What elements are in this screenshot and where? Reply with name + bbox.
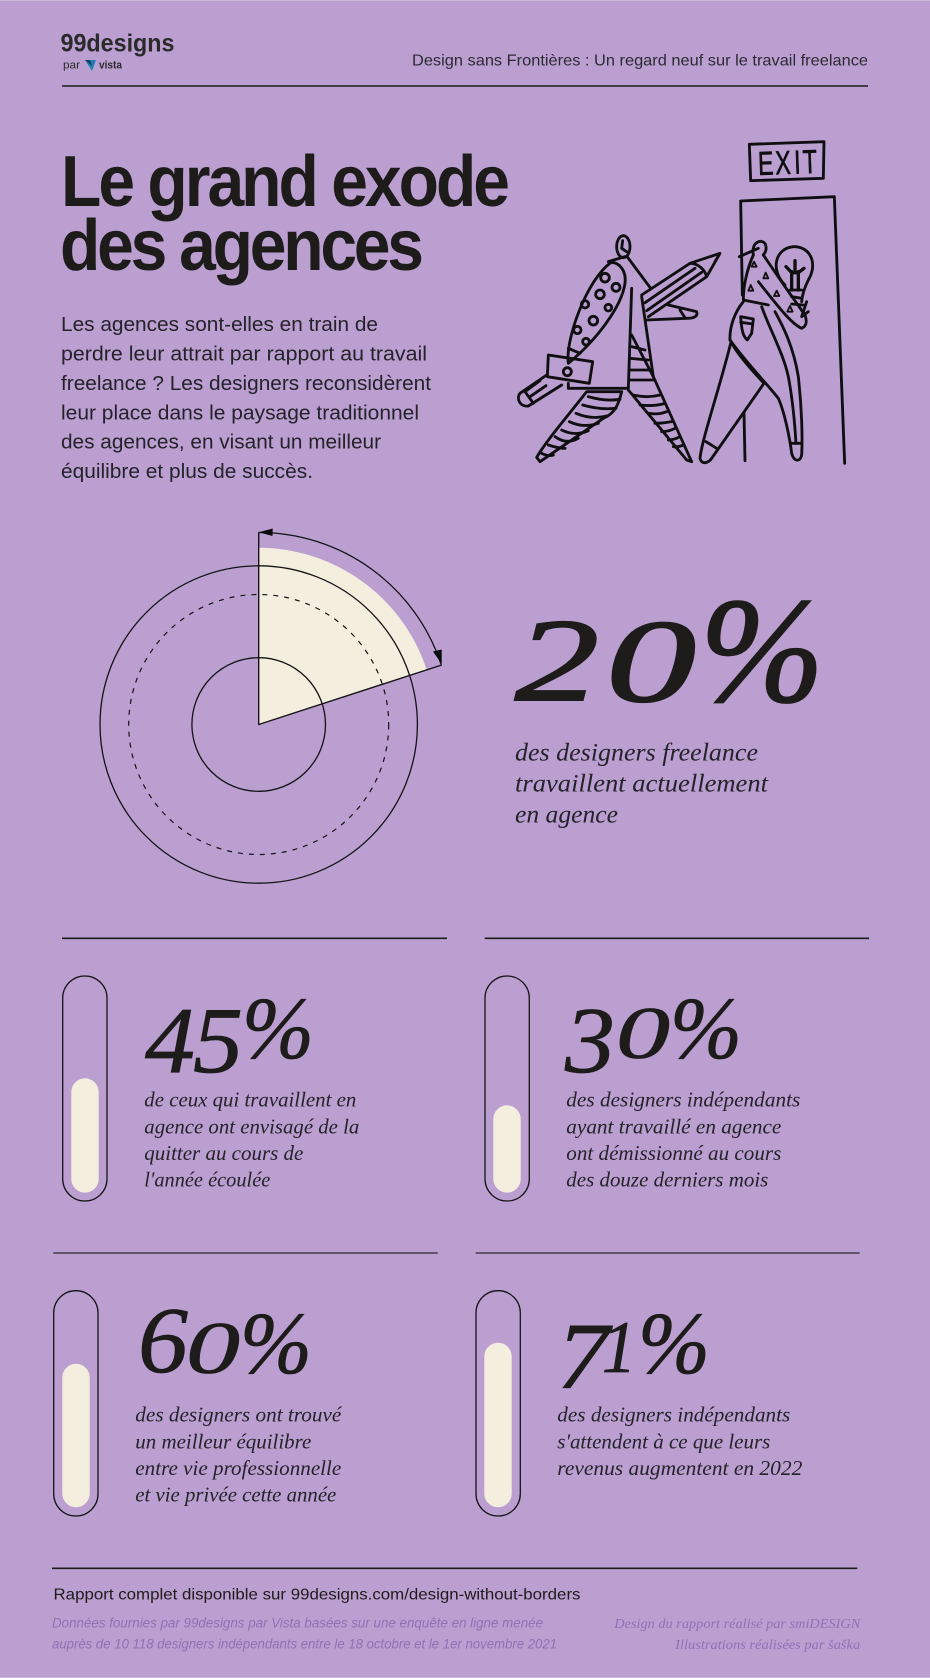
- icon: walking figure with pencil: [518, 236, 720, 462]
- caption: travaillent actuellement: [515, 771, 769, 798]
- caption: [135, 1403, 343, 1507]
- caption: et vie privée cette année: [135, 1483, 336, 1507]
- caption: des designers indépendants: [566, 1088, 800, 1112]
- stat panel: 71%: [476, 1253, 860, 1516]
- icon: exit sign: EXIT: [757, 144, 818, 183]
- outer circle: [100, 566, 417, 883]
- pill gauge 45%: [63, 976, 107, 1201]
- radial chart: 20% wedge: [100, 528, 442, 883]
- caption: s'attendent à ce que leurs: [557, 1429, 770, 1453]
- data source note: [52, 1616, 557, 1651]
- pencil: [518, 375, 562, 406]
- stat panel: 30%: [485, 938, 869, 1201]
- stat panel: 60%: [53, 1253, 438, 1516]
- pill gauge 30%: [485, 976, 529, 1201]
- intro text: leur place dans le paysage traditionnel: [61, 402, 419, 424]
- caption: entre vie professionnelle: [135, 1456, 341, 1480]
- caption: [557, 1403, 803, 1480]
- value 45%: [145, 981, 314, 1093]
- caption: ont démissionné au cours: [566, 1141, 781, 1165]
- caption: des designers indépendants: [557, 1403, 790, 1427]
- caption: [144, 1088, 359, 1192]
- hand: [647, 305, 697, 320]
- arrowheads: [259, 528, 442, 664]
- value 30%: %: [670, 981, 742, 1078]
- title: [60, 141, 510, 286]
- credits: [613, 1616, 861, 1652]
- radial edges: [259, 532, 442, 724]
- credits: Illustrations réalisées par šaška: [674, 1637, 860, 1652]
- big stat: 20%: 2: [515, 595, 599, 726]
- caption: des designers ont trouvé: [135, 1403, 343, 1427]
- inner circle: [192, 658, 326, 791]
- logo: 99designs par vista: par: [63, 59, 80, 71]
- striped legs: [537, 392, 622, 462]
- icon: figure holding lightbulb: [700, 241, 813, 463]
- big stat: 20%: [515, 568, 824, 829]
- wedge: [259, 548, 427, 724]
- logo: 99designs par vista: [60, 30, 174, 71]
- footer: [52, 1568, 861, 1652]
- value 30%: [564, 981, 742, 1093]
- value 45%: 4: [145, 989, 195, 1093]
- value 30%: 0: [616, 993, 670, 1075]
- stat panel: 45%: [62, 938, 447, 1201]
- icon: door: [741, 197, 845, 463]
- intro text: [61, 314, 431, 483]
- pill gauge 71%: [476, 1291, 520, 1516]
- logo: 99designs par vista: 99designs: [60, 30, 174, 58]
- caption: des douze derniers mois: [566, 1168, 768, 1192]
- value 71%: [557, 1296, 710, 1409]
- report link: Rapport complet disponible sur 99designs.com/design-without-borders: [54, 1586, 580, 1603]
- caption: revenus augmentent en 2022: [557, 1456, 803, 1480]
- caption: quitter au cours de: [144, 1141, 303, 1165]
- arc arrow: [259, 532, 441, 665]
- title: des agences: [60, 205, 424, 286]
- caption: [566, 1088, 800, 1192]
- dashed circle: [129, 594, 389, 854]
- value 45%: 5: [193, 989, 243, 1093]
- intro text: perdre leur attrait par rapport au travail: [61, 344, 427, 366]
- logo: 99designs par vista: vista: [99, 59, 123, 71]
- value 71%: 1: [602, 1307, 636, 1389]
- value 60%: 0: [186, 1308, 240, 1390]
- illustration: two figures leaving through exit door: [518, 142, 845, 463]
- caption: l'année écoulée: [144, 1168, 270, 1192]
- caption: ayant travaillé en agence: [566, 1114, 781, 1138]
- value 71%: %: [638, 1296, 710, 1393]
- big stat: 20%: 0: [606, 596, 696, 727]
- value 45%: %: [242, 981, 314, 1078]
- caption: [515, 740, 769, 829]
- credits: Design du rapport réalisé par smiDESIGN: [613, 1616, 861, 1631]
- intro text: freelance ? Les designers reconsidèrent: [61, 373, 431, 395]
- value 71%: 7: [557, 1305, 613, 1409]
- intro text: équilibre et plus de succès.: [61, 461, 313, 483]
- value 60%: [138, 1289, 312, 1393]
- caption: des designers freelance: [515, 740, 758, 767]
- briefcase: [547, 355, 593, 383]
- caption: un meilleur équilibre: [135, 1429, 311, 1453]
- caption: agence ont envisagé de la: [144, 1114, 359, 1138]
- caption: en agence: [515, 802, 618, 829]
- trousers: [700, 302, 764, 463]
- intro text: des agences, en visant un meilleur: [61, 432, 381, 454]
- data source note: Données fournies par 99designs par Vista basées sur une enquête en ligne menée: [52, 1616, 543, 1631]
- pill gauge 60%: [54, 1291, 98, 1516]
- caption: de ceux qui travaillent en: [144, 1088, 356, 1112]
- big stat: 20%: %: [700, 568, 824, 734]
- lightbulb: [776, 247, 813, 302]
- intro text: Les agences sont-elles en train de: [61, 314, 378, 336]
- value 60%: 6: [138, 1289, 188, 1393]
- header: [60, 30, 868, 71]
- value 30%: 3: [564, 989, 615, 1093]
- data source note: auprès de 10 118 designers indépendants entre le 18 octobre et le 1er novembre 2021: [52, 1636, 557, 1651]
- polka-dot sleeve: [568, 263, 625, 363]
- value 60%: %: [240, 1296, 312, 1393]
- header subtitle: Design sans Frontières : Un regard neuf sur le travail freelance: [412, 53, 868, 70]
- title: Le grand exode: [61, 141, 510, 222]
